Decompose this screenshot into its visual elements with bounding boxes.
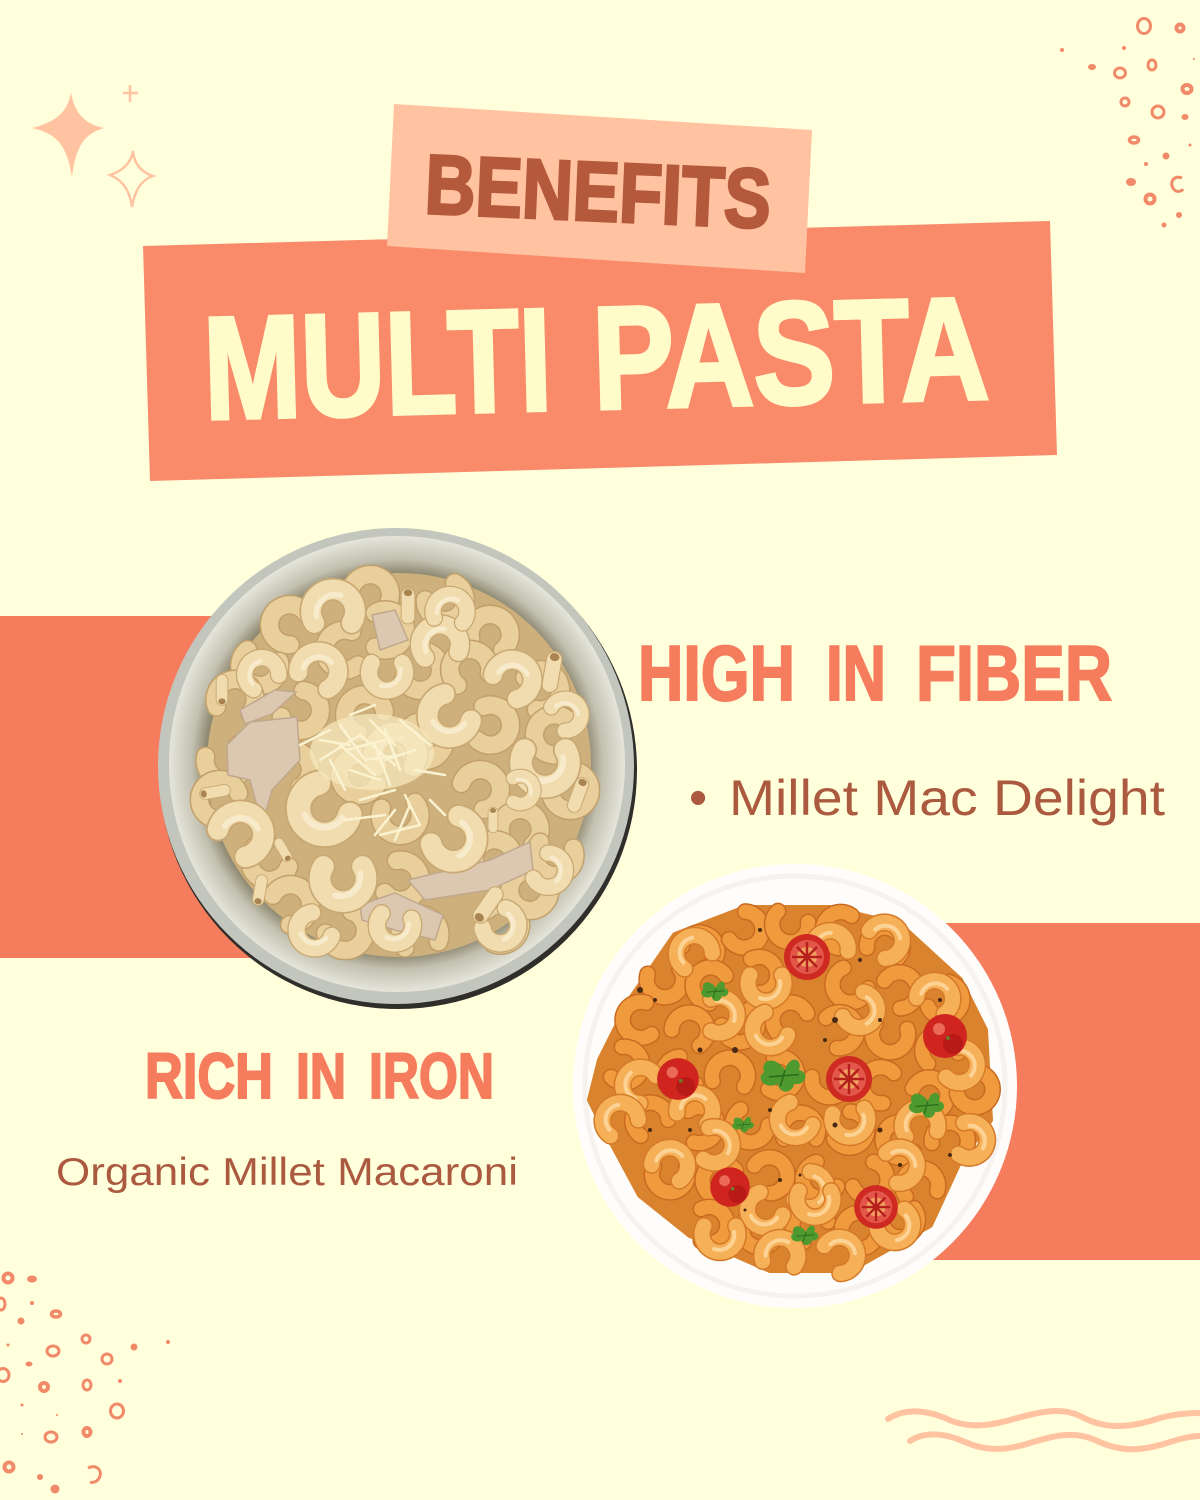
grated parmesan xyxy=(300,705,445,840)
section: high in fiber xyxy=(638,629,1165,827)
heading: RICH IN IRON xyxy=(145,1040,494,1112)
photo: plate of red macaroni xyxy=(573,864,1017,1308)
list item: Organic Millet Macaroni: Organic Millet Macaroni xyxy=(56,1151,518,1194)
title: MULTI PASTA: MULTI xyxy=(202,278,554,450)
heading: RICH IN IRON: IN xyxy=(296,1040,346,1112)
heading: HIGH IN FIBER: HIGH xyxy=(638,629,795,717)
back layer of macaroni xyxy=(191,566,599,959)
photo: bowl of creamy macaroni xyxy=(158,528,637,1009)
section: rich in iron xyxy=(56,1040,518,1194)
left salmon band xyxy=(0,616,260,958)
tomatoes xyxy=(657,934,967,1229)
heading: BENEFITS: BENEFITS xyxy=(423,137,773,246)
icon: sparkles xyxy=(32,85,153,207)
decoration: waves xyxy=(888,1411,1200,1449)
chicken pieces xyxy=(227,610,533,940)
title: MULTI PASTA: PASTA xyxy=(590,266,991,440)
title: MULTI PASTA xyxy=(202,266,991,450)
pepper flecks xyxy=(637,928,952,1212)
list item: Millet Mac Delight: Millet Mac Delight xyxy=(729,770,1165,826)
right salmon band xyxy=(900,923,1200,1260)
heading: HIGH IN FIBER: IN xyxy=(826,629,886,717)
heading: HIGH IN FIBER: FIBER xyxy=(916,629,1112,717)
list item: Millet Mac Delight: • xyxy=(689,769,707,827)
back layer of macaroni xyxy=(610,909,1000,1252)
herbs xyxy=(701,982,944,1245)
decoration: dots top right xyxy=(1060,18,1195,228)
title banner xyxy=(143,221,1057,481)
front layer of macaroni xyxy=(216,589,587,956)
heading: HIGH IN FIBER xyxy=(638,629,1112,717)
front layer of macaroni xyxy=(596,916,990,1275)
macaroni tubes xyxy=(200,589,588,923)
heading: RICH IN IRON: IRON xyxy=(369,1040,494,1112)
benefits tag xyxy=(387,104,812,273)
parmesan mound xyxy=(310,714,434,790)
decoration: dots bottom left xyxy=(0,1274,170,1494)
heading: RICH IN IRON: RICH xyxy=(145,1040,273,1112)
